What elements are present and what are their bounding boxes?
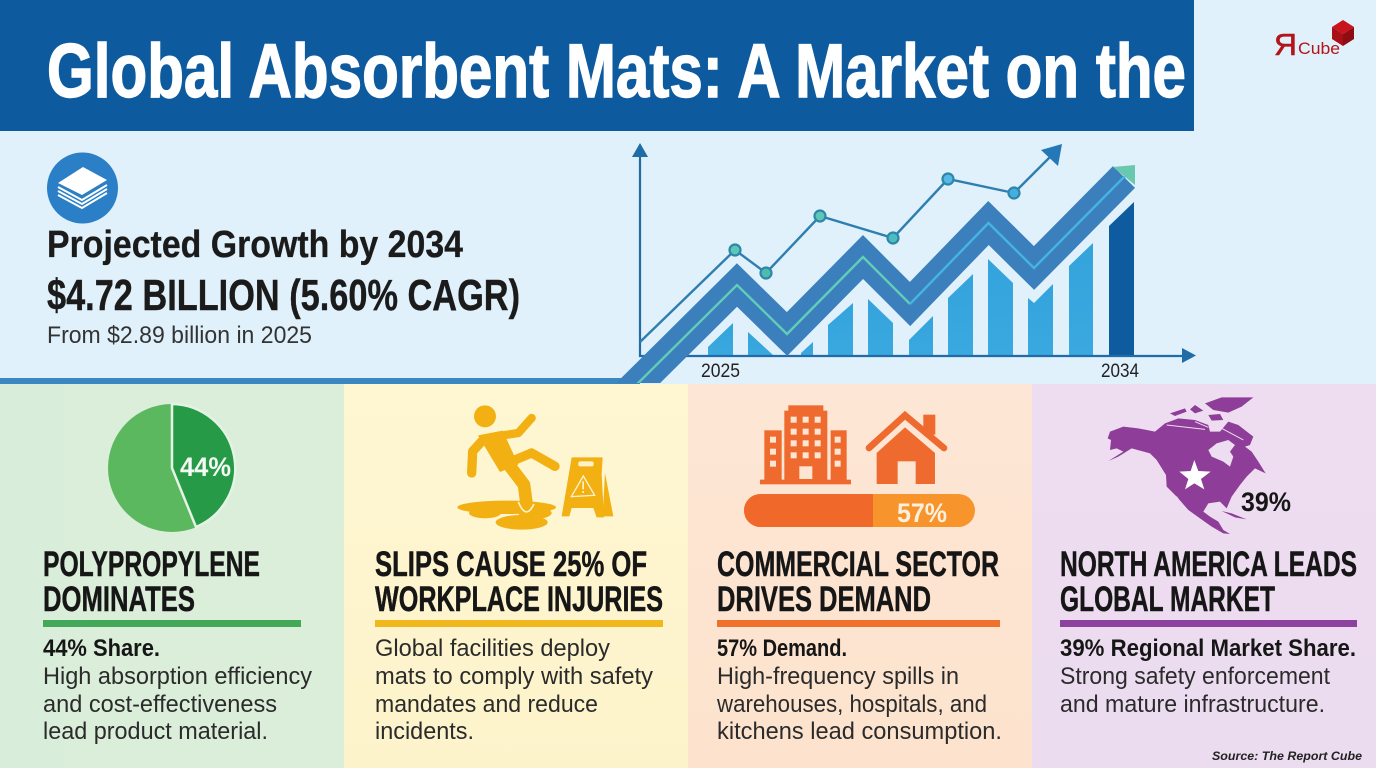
map label: 39%: 39%	[1241, 487, 1291, 517]
base figure: From $2.89 billion in 2025	[47, 322, 312, 349]
heading	[1060, 544, 1357, 619]
icon: slipping person and wet floor sign	[457, 405, 613, 530]
body text	[43, 635, 312, 745]
body text: Strong safety enforcement	[1060, 663, 1330, 690]
heading: COMMERCIAL SECTOR	[717, 544, 999, 584]
panel: projected growth	[47, 152, 520, 349]
body text: mandates and reduce	[375, 691, 598, 718]
icon: stacked mats	[47, 152, 118, 224]
heading	[375, 544, 663, 619]
icon: office buildings	[760, 405, 851, 484]
icon: north america map	[1108, 397, 1266, 534]
panel: polypropylene	[0, 384, 344, 768]
panel: commercial sector	[688, 384, 1032, 768]
panel: north america	[1032, 384, 1376, 768]
body text: and mature infrastructure.	[1060, 691, 1325, 718]
body text	[375, 635, 653, 745]
bars	[708, 243, 1093, 356]
divider line	[0, 378, 640, 384]
key figure: $4.72 BILLION (5.60% CAGR)	[47, 271, 520, 320]
body text: mats to comply with safety	[375, 663, 653, 690]
star marker	[1179, 460, 1211, 489]
body text: 39% Regional Market Share.	[1060, 635, 1356, 662]
logo: RCube: Cube	[1298, 39, 1340, 58]
header banner	[0, 0, 1194, 131]
growth chart	[618, 143, 1196, 403]
pie chart: 44%	[108, 404, 236, 532]
body text	[1060, 635, 1356, 718]
heading	[43, 544, 260, 619]
zigzag band	[618, 165, 1135, 403]
page background	[0, 0, 1376, 384]
body text: and cost-effectiveness	[43, 691, 277, 718]
label: 2034: 2034	[1101, 361, 1139, 382]
body text: 57% Demand.	[717, 635, 847, 662]
logo: RCube	[1274, 20, 1354, 62]
panel: slips	[344, 384, 688, 768]
heading: WORKPLACE INJURIES	[375, 579, 663, 619]
progress bar: 57%: 57%	[897, 498, 947, 528]
heading: DOMINATES	[43, 579, 195, 619]
body text: lead product material.	[43, 718, 268, 745]
body text: High-frequency spills in	[717, 663, 959, 690]
body text: warehouses, hospitals, and	[716, 691, 987, 718]
pie chart: 44%: 44%	[180, 452, 231, 482]
heading: DRIVES DEMAND	[717, 579, 931, 619]
heading	[717, 544, 999, 619]
body text: incidents.	[375, 718, 474, 745]
body text: 44% Share.	[43, 635, 160, 662]
body text: High absorption efficiency	[43, 663, 312, 690]
source note: Source: The Report Cube	[1212, 749, 1362, 763]
heading: POLYPROPYLENE	[43, 544, 260, 584]
body text: Global facilities deploy	[375, 635, 610, 662]
body text: kitchens lead consumption.	[717, 718, 1002, 745]
logo: RCube: Я	[1274, 27, 1297, 62]
label: 2025: 2025	[701, 361, 740, 382]
trend line with markers	[640, 144, 1062, 342]
heading: GLOBAL MARKET	[1060, 579, 1275, 619]
progress bar: 57%	[744, 494, 975, 528]
axes	[632, 143, 1196, 363]
icon: house	[869, 415, 944, 484]
heading: SLIPS CAUSE 25% OF	[375, 544, 647, 584]
final bar	[1109, 202, 1134, 356]
body text	[716, 635, 1002, 745]
heading: projected growth: Projected Growth by 2034	[47, 224, 463, 266]
